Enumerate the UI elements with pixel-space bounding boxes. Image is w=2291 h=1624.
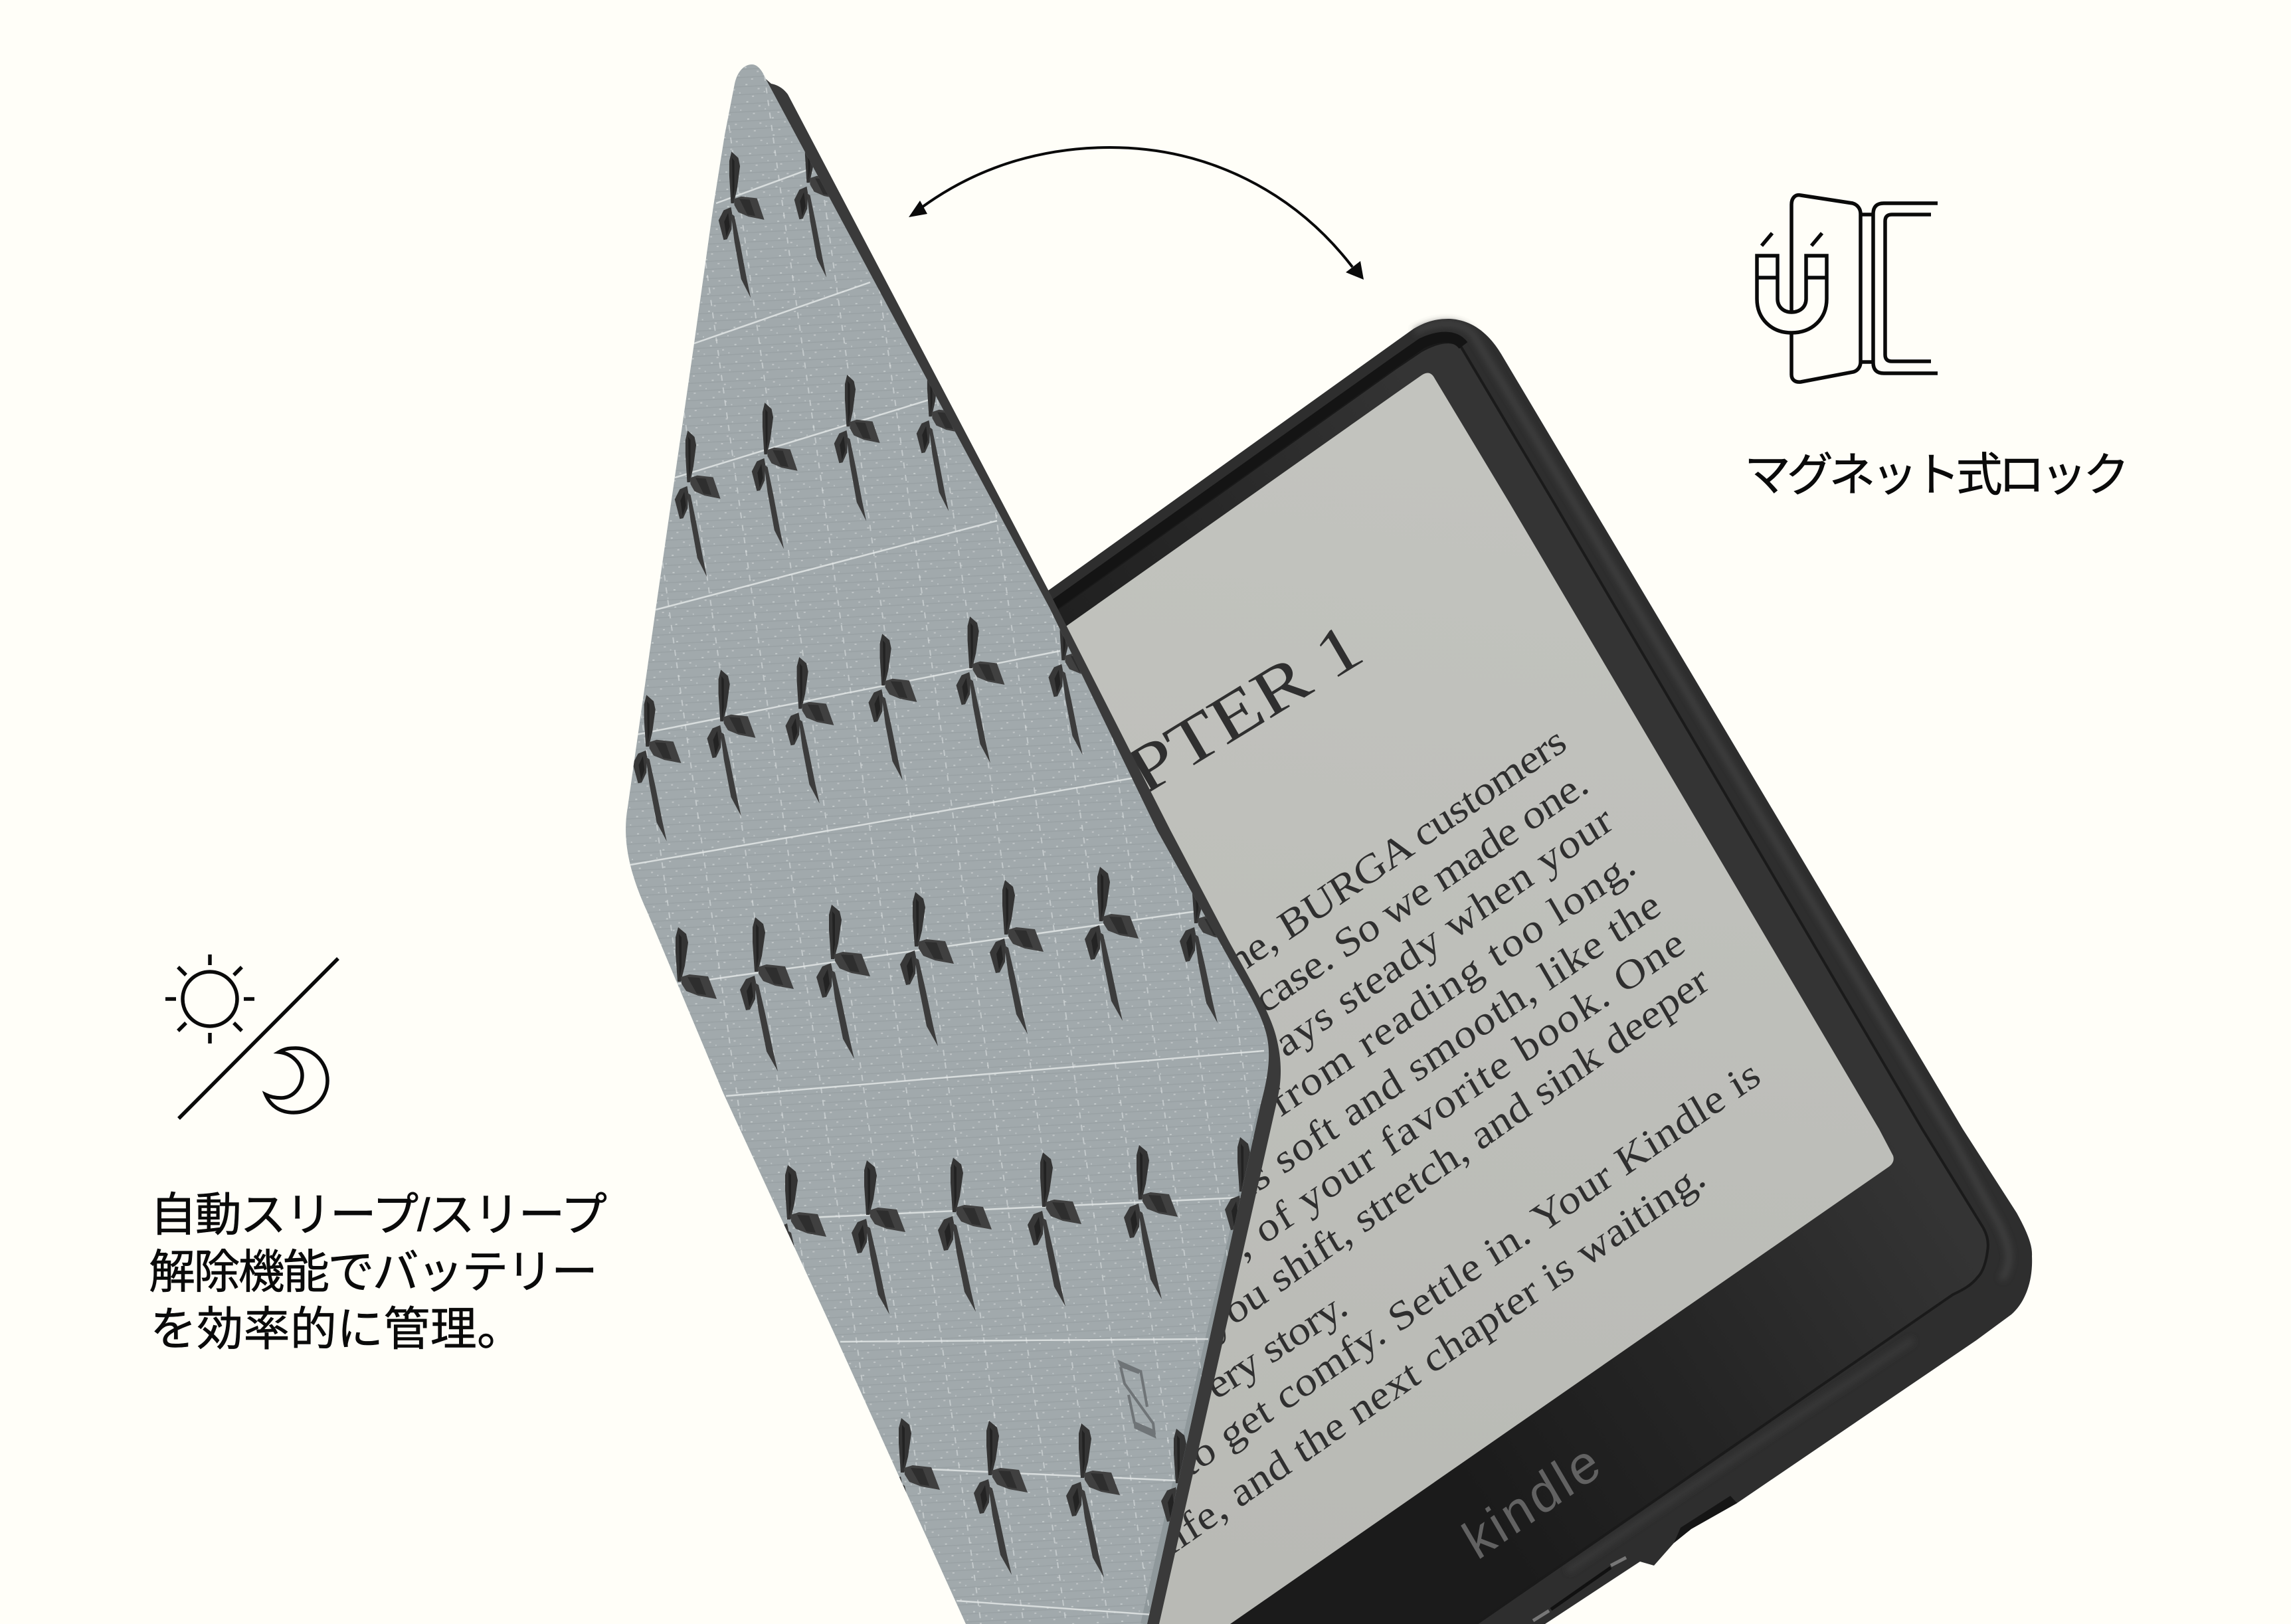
text line 3: を効率的に管理。 [150,1303,523,1355]
cover stitching and bows [630,75,1264,1624]
bow row 5 [784,1137,1250,1314]
hinge [1861,215,1873,362]
inner shaded band [1144,1109,1261,1624]
text line 2: 解除機能でバッテリー [149,1246,598,1298]
bow row 3 [632,608,1097,842]
line 9: to get comfy. Settle in. Your Kindle is [1172,1051,1768,1485]
line 4: from reading too long. [1262,841,1643,1125]
bow row 1 [719,151,829,298]
sun [165,954,254,1043]
horizontal stitches [630,168,1264,1615]
device inner rail [1885,215,1931,361]
cover dark edge [757,79,1281,1624]
vertical dashed stitches [640,75,1253,1618]
cover fabric [626,64,1269,1624]
horseshoe magnet [1757,256,1827,333]
icon: magnetic lock [1757,195,1938,382]
line 1: the, BURGA customers [1209,717,1573,990]
double-headed arc arrow [909,147,1364,280]
bow row 2 [675,365,962,577]
magnetic ticks [1762,233,1822,246]
bow row 4 [663,867,1234,1081]
book page text [966,608,1768,1564]
fabric folio cover [626,64,1281,1624]
text line 1: 自動スリープ/スリープ [150,1189,607,1241]
slash [179,958,338,1119]
power wheel [1674,1496,1737,1543]
debossed logo [1118,1360,1156,1438]
e-ink screen [996,373,1894,1624]
left arrowhead [909,201,927,217]
sleep feature text [149,1189,607,1355]
right arrowhead [1346,261,1364,280]
line 5: is soft and smooth, like the [1230,881,1668,1207]
kindle device [966,319,2032,1624]
line 6: , of your favorite book. One [1226,919,1692,1267]
bottom port details [1533,1558,1626,1621]
icon: sun and moon [165,954,338,1119]
cover flap outline [1791,195,1861,382]
line 3: always steady when your [1212,796,1620,1104]
line 7: you shift, stretch, and sink deeper [1197,956,1716,1346]
upper rail shadow [1053,337,1463,606]
line 2: case. So we made one. [1247,760,1596,1022]
line 8: every story. [1164,1282,1354,1430]
line 10: life, and the next chapter is waiting. [1152,1152,1712,1564]
chapter heading: CHAPTER 1 [966,608,1375,899]
device bezel [996,342,1988,1624]
case rim highlights [1415,323,2009,1571]
kindle logo: kindle [1453,1431,1609,1571]
device outer rail [1873,203,1938,373]
bow row 6 [899,1418,1186,1578]
label: magnetic lock: マグネット式ロック [1744,449,2130,501]
moon [266,1048,327,1113]
device outer case [996,319,2032,1624]
